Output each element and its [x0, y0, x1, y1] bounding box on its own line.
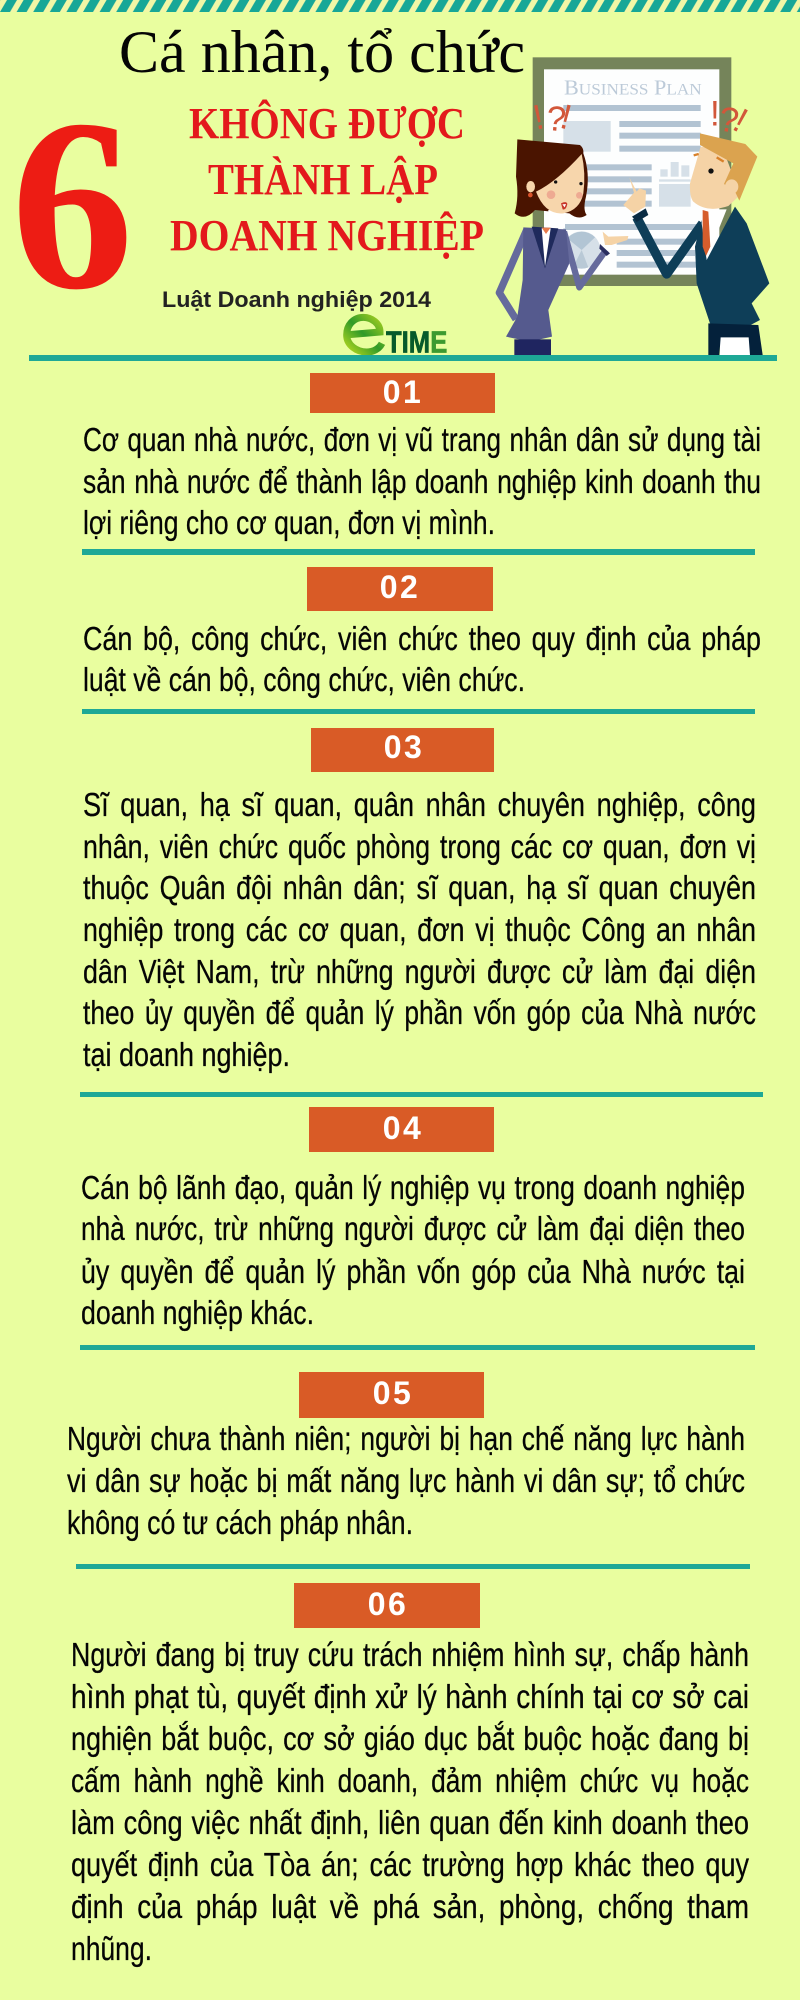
question marks: ?	[716, 99, 742, 141]
text 03: tại doanh nghiệp.	[83, 1036, 290, 1073]
badge 01: 01	[383, 374, 423, 410]
logo: eTIME	[347, 317, 447, 360]
panel: item 06	[71, 1583, 749, 1967]
man	[623, 133, 769, 355]
text 04: doanh nghiệp khác.	[81, 1294, 314, 1331]
badge 01	[310, 373, 495, 413]
question marks: !	[557, 97, 575, 137]
panel: item 03	[83, 728, 756, 1073]
red heading	[170, 99, 484, 260]
text 05: không có tư cách pháp nhân.	[67, 1504, 413, 1541]
text 05	[67, 1420, 745, 1541]
text 06: nhũng.	[71, 1930, 152, 1967]
woman	[499, 139, 628, 355]
question marks: !	[530, 97, 547, 138]
badge 02: 02	[380, 569, 420, 605]
big number 6: 6	[11, 69, 134, 340]
text 06	[71, 1636, 749, 1967]
text 02	[83, 620, 761, 698]
panel: item 04	[81, 1107, 745, 1331]
title line: Cá nhân, tổ chức	[119, 19, 525, 85]
badge 06	[294, 1583, 480, 1628]
text 02: luật về cán bộ, công chức, viên chức.	[83, 661, 525, 698]
badge 03	[311, 728, 494, 772]
header divider	[29, 355, 777, 361]
badge 05	[299, 1372, 484, 1418]
illustration: business plan board with two people	[499, 57, 769, 355]
text 04	[81, 1169, 745, 1331]
header	[11, 19, 769, 360]
board content	[563, 105, 701, 269]
badge 04	[309, 1107, 494, 1152]
question marks: !	[727, 101, 754, 140]
text 03	[83, 786, 756, 1073]
badge 06: 06	[368, 1586, 408, 1622]
panel: item 02	[83, 567, 761, 698]
badge 05: 05	[373, 1375, 413, 1411]
question marks: !	[710, 94, 720, 133]
red heading: KHÔNG ĐƯỢC	[189, 99, 465, 148]
red heading: THÀNH LẬP	[208, 155, 438, 204]
red heading: DOANH NGHIỆP	[170, 211, 484, 260]
badge 03: 03	[384, 729, 424, 765]
subtitle: Luật Doanh nghiệp 2014	[162, 287, 432, 312]
text 01	[83, 421, 761, 541]
top stripe band	[0, 0, 800, 12]
logo: eTIME: TIME	[386, 326, 447, 360]
badge 04: 04	[383, 1110, 423, 1146]
board heading: BUSINESS PLAN	[564, 78, 702, 100]
panel: item 01	[83, 373, 761, 541]
question marks: ?	[545, 99, 568, 139]
text 01: lợi riêng cho cơ quan, đơn vị mình.	[83, 504, 495, 541]
board frame	[533, 57, 731, 286]
question marks	[530, 94, 754, 141]
panel: item 05	[67, 1372, 745, 1541]
badge 02	[307, 567, 493, 611]
